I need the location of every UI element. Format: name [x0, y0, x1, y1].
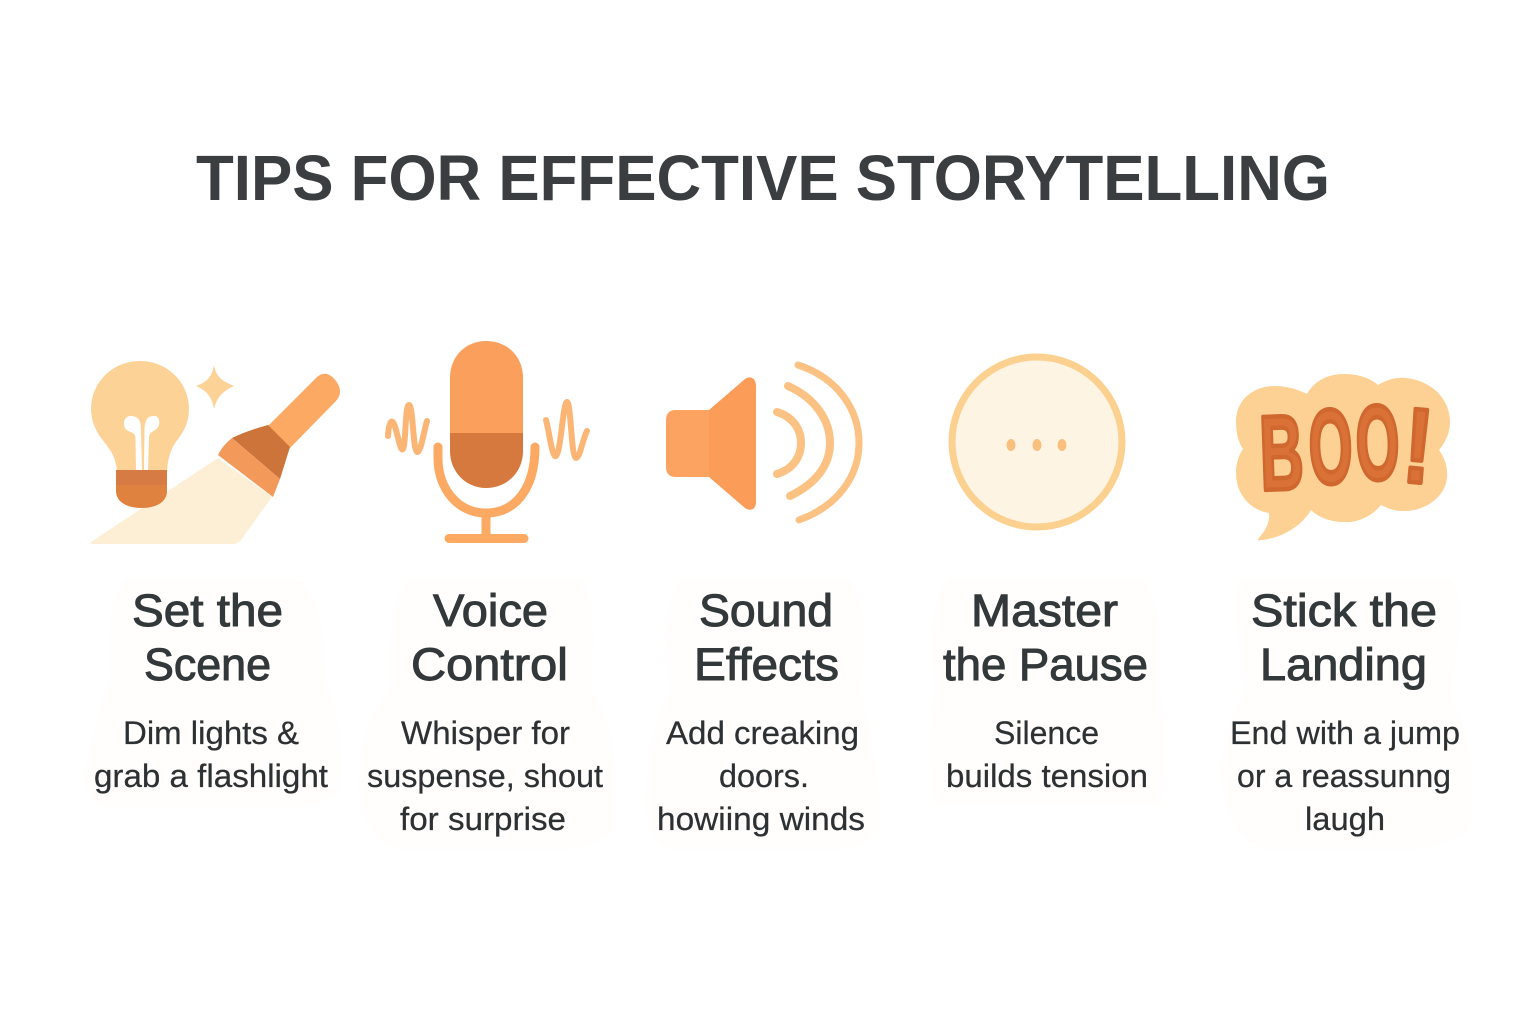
speaker cone: [709, 377, 756, 510]
flashlight head rim: [218, 438, 280, 497]
light bulb glass: [91, 361, 189, 472]
outer sound arc: [798, 365, 859, 520]
description: suspense, shout: [367, 758, 603, 794]
BOO lettering: B: [1258, 394, 1305, 513]
description: [946, 715, 1148, 794]
description: [367, 715, 603, 837]
heading: Master: [971, 585, 1118, 636]
text block: Stick the Landing: [1220, 578, 1472, 850]
description: for surprise: [400, 801, 566, 837]
BOO lettering: !: [1399, 386, 1437, 507]
BOO lettering: O: [1307, 386, 1354, 506]
description: howiing winds: [657, 801, 865, 837]
mic cradle: [438, 447, 535, 513]
mic capsule bottom: [450, 433, 523, 488]
description: [657, 715, 865, 837]
heading: [1251, 585, 1437, 690]
flashlight collar: [232, 425, 290, 479]
heading: Stick the: [1251, 585, 1437, 636]
icon: BOO speech bubble: [1236, 374, 1450, 540]
heading: [694, 585, 839, 690]
description: doors.: [719, 758, 809, 794]
heading: Voice: [433, 585, 548, 636]
description: Add creaking: [666, 715, 859, 751]
heading: Landing: [1260, 639, 1427, 690]
description: End with a jump: [1230, 715, 1460, 751]
heading: Control: [411, 639, 568, 690]
right sound wave: [546, 402, 587, 458]
speaker box: [666, 410, 710, 477]
flashlight beam: [91, 458, 272, 544]
title: TIPS FOR EFFECTIVE STORYTELLING: [196, 142, 1330, 214]
icon: lightbulb and flashlight: [91, 361, 340, 544]
sparkle: [196, 365, 234, 409]
icon: pause speech circle with dots: [952, 357, 1122, 527]
heading: the Pause: [943, 639, 1148, 690]
heading: [411, 585, 568, 690]
heading: [132, 585, 283, 690]
BOO lettering: O: [1354, 382, 1401, 502]
mic stand: [449, 513, 524, 538]
description: [94, 715, 328, 794]
icon: microphone with sound waves: [388, 341, 587, 538]
text block: Master the Pause: [930, 578, 1165, 805]
text block: Sound Effects: [645, 578, 880, 850]
bulb filament: [124, 416, 159, 471]
mic capsule top: [450, 341, 523, 433]
description: [1230, 715, 1460, 837]
flashlight handle: [266, 374, 340, 449]
description: grab a flashlight: [94, 758, 328, 794]
heading: Set the: [132, 585, 283, 636]
heading: Sound: [699, 585, 833, 636]
icon: speaker with sound arcs: [666, 365, 859, 520]
heading: Effects: [694, 639, 839, 690]
description: Whisper for: [401, 715, 570, 751]
description: laugh: [1305, 801, 1385, 837]
bubble: [1236, 374, 1450, 540]
three dots: [1006, 439, 1016, 451]
heading: [943, 585, 1148, 690]
text block: Set the Scene: [84, 578, 341, 808]
heading: Scene: [144, 639, 271, 690]
left sound wave: [388, 405, 427, 452]
BOO lettering: [1258, 382, 1437, 513]
text block: Voice Control: [358, 578, 616, 850]
middle sound arc: [788, 386, 830, 496]
description: or a reassunng: [1237, 758, 1451, 794]
description: builds tension: [946, 758, 1148, 794]
circle: [952, 357, 1122, 527]
description: Dim lights &: [123, 715, 299, 751]
bulb base: [116, 470, 167, 508]
description: Silence: [994, 715, 1099, 751]
inner sound arc: [777, 412, 801, 474]
